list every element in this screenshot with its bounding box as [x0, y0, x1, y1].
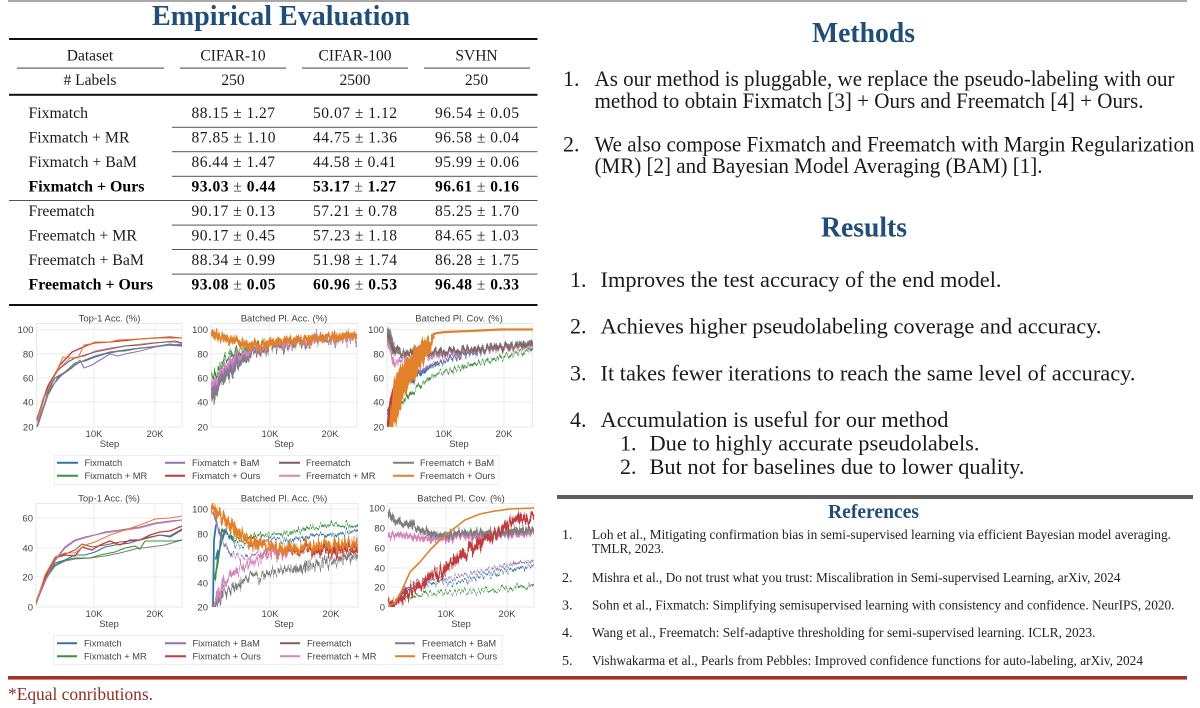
row: Freematch + MR: Freematch + MR: [28, 228, 138, 244]
legend item: Freematch + BaM: Freematch + BaM: [422, 639, 496, 649]
row: Freematch + BaM: [28, 252, 519, 269]
line chart: bottom row batched pseudo-label coverage: Step: [451, 619, 471, 630]
line chart: top row batched pseudo-label accuracy: 80: [197, 350, 208, 360]
row: Freematch + Ours: [28, 276, 519, 294]
line chart: bottom row batched pseudo-label coverage: 80: [374, 524, 385, 534]
table header: labels: # Labels: [64, 72, 116, 89]
row: Fixmatch + MR: 44.75 ± 1.36: [313, 130, 397, 146]
row: Fixmatch + BaM: 95.99 ± 0.06: [435, 154, 519, 171]
line chart: top row Top-1 accuracy: 100: [18, 325, 34, 336]
legend item: Freematch + Ours: Freematch + Ours: [422, 652, 498, 662]
table header: dataset: CIFAR-10: [200, 48, 266, 64]
row: Freematch: Freematch: [28, 203, 95, 220]
result item 1: Improves the test accuracy of the end model.: [600, 267, 1002, 292]
row: Freematch + Ours: Freematch + Ours: [28, 276, 153, 294]
row: Fixmatch + Ours: [28, 178, 519, 196]
legend item: Freematch + Ours: Freematch + Ours: [420, 471, 496, 481]
results table: [9, 38, 538, 306]
row: Freematch: [28, 203, 519, 220]
references list: [562, 528, 1174, 669]
line chart: top row batched pseudo-label accuracy: 10K: [262, 429, 279, 440]
line chart: top row batched pseudo-label coverage: [368, 314, 532, 450]
reference 4: Wang et al., Freematch: Self-adaptive thresholding for semi-supervised learning. ICLR, 2023.: [592, 626, 1096, 641]
line chart: top row batched pseudo-label accuracy: 40: [197, 398, 208, 408]
table header: labels: [64, 72, 488, 89]
methods list: [563, 66, 1194, 178]
line chart: bottom row Top-1 accuracy: Step: [99, 619, 119, 630]
row: Fixmatch + BaM: 44.58 ± 0.41: [313, 154, 396, 171]
legend item: Freematch + MR: Freematch + MR: [307, 652, 377, 662]
legend item: Fixmatch + Ours: Fixmatch + Ours: [192, 471, 261, 481]
line chart: bottom row batched pseudo-label accuracy: 20: [197, 602, 208, 614]
line chart: bottom row batched pseudo-label coverage: [369, 494, 534, 630]
row: Freematch: 57.21 ± 0.78: [313, 203, 397, 220]
legend item: Fixmatch + MR: Fixmatch + MR: [84, 652, 147, 662]
line chart: top row Top-1 accuracy: [18, 314, 182, 450]
line chart: top row Top-1 accuracy: 20: [23, 422, 34, 434]
reference 1: 1.: [562, 528, 572, 543]
result item 2: Achieves higher pseudolabeling coverage and accuracy.: [600, 314, 1102, 338]
row: Fixmatch + BaM: Fixmatch + BaM: [28, 154, 137, 171]
legend item: Fixmatch: Fixmatch: [84, 458, 122, 468]
line chart: top row batched pseudo-label coverage: Step: [449, 439, 469, 450]
line chart: bottom row batched pseudo-label coverage: 40: [374, 564, 385, 574]
line chart: top row batched pseudo-label accuracy: 100: [192, 325, 208, 336]
row: Fixmatch + Ours: 53.17 ± 1.27: [313, 178, 396, 196]
legend item: Fixmatch + BaM: Fixmatch + BaM: [192, 458, 259, 468]
table header: dataset: [67, 48, 498, 64]
row: Fixmatch: Fixmatch: [28, 105, 88, 122]
title: Empirical Evaluation: Empirical Evaluation: [152, 1, 410, 32]
line chart: bottom row batched pseudo-label coverage: 100: [369, 504, 385, 514]
method item 1: [563, 66, 1175, 113]
results list: [570, 267, 1136, 479]
result item 1: 1.: [570, 267, 586, 292]
row: Fixmatch + BaM: 86.44 ± 1.47: [192, 154, 275, 171]
legend item: Fixmatch + MR: [57, 652, 147, 662]
row: Freematch + BaM: 88.34 ± 0.99: [192, 252, 275, 269]
legend item: Freematch + MR: Freematch + MR: [306, 471, 376, 481]
row: Freematch + MR: [28, 228, 519, 244]
reference 5: 5.: [562, 654, 572, 669]
result sub-item 2: But not for baselines due to lower quality.: [650, 454, 1024, 479]
line chart: top row batched pseudo-label coverage: Batched Pl. Cov. (%): [415, 314, 503, 324]
legend item: Freematch: Freematch: [307, 639, 351, 649]
line chart: bottom row Top-1 accuracy: 20: [22, 572, 33, 584]
legend item: Fixmatch: Fixmatch: [84, 639, 122, 649]
table header: dataset: CIFAR-100: [319, 48, 392, 64]
row: Freematch: 90.17 ± 0.13: [192, 203, 275, 220]
line chart: bottom row batched pseudo-label accuracy: 40: [197, 578, 208, 590]
legend item: Fixmatch: [57, 458, 122, 468]
line chart: bottom row batched pseudo-label accuracy: Step: [274, 619, 294, 630]
legend item: Freematch + BaM: Freematch + BaM: [420, 458, 494, 468]
row: Fixmatch: 88.15 ± 1.27: [192, 105, 275, 122]
line chart: top row batched pseudo-label accuracy: 20: [197, 422, 208, 434]
line chart: top row Top-1 accuracy: 10K: [86, 429, 103, 440]
row: Freematch + Ours: 93.08 ± 0.05: [192, 276, 276, 294]
method item 2: (MR) [2] and Bayesian Model Averaging (BAM) [1].: [594, 153, 1042, 178]
result item 3: It takes fewer iterations to reach the same level of accuracy.: [600, 360, 1136, 386]
result sub-item 2: 2.: [620, 454, 636, 479]
row: Freematch + BaM: 51.98 ± 1.74: [313, 252, 397, 269]
row: Fixmatch: 96.54 ± 0.05: [435, 105, 519, 122]
line chart: top row batched pseudo-label coverage: 20K: [496, 429, 513, 440]
row: Freematch + Ours: 96.48 ± 0.33: [435, 276, 519, 294]
reference 1: TMLR, 2023.: [592, 542, 664, 557]
line chart: top row batched pseudo-label accuracy: Batched Pl. Acc. (%): [241, 314, 327, 324]
line chart: top row batched pseudo-label coverage: 100: [368, 325, 384, 336]
reference 3: Sohn et al., Fixmatch: Simplifying semisupervised learning with consistency and confidence. NeurIPS, 2020.: [592, 598, 1174, 614]
legend item: Freematch: [280, 639, 351, 649]
line chart: bottom row Top-1 accuracy: [22, 494, 182, 630]
line chart: bottom row batched pseudo-label accuracy: Batched Pl. Acc. (%): [241, 494, 327, 504]
row: Fixmatch: 50.07 ± 1.12: [313, 105, 397, 122]
legend: top row: [54, 456, 499, 484]
line chart: bottom row Top-1 accuracy: 10K: [86, 609, 103, 620]
row: Fixmatch + MR: 96.58 ± 0.04: [435, 130, 519, 146]
line chart: bottom row Top-1 accuracy: 60: [22, 514, 33, 524]
row: Freematch + BaM: 86.28 ± 1.75: [435, 252, 519, 269]
method item 1: 1.: [563, 66, 580, 91]
row: Freematch + Ours: 60.96 ± 0.53: [313, 276, 397, 294]
line chart: top row batched pseudo-label coverage: 10K: [436, 429, 453, 440]
line chart: bottom row batched pseudo-label accuracy: 60: [197, 554, 208, 564]
line chart: bottom row Top-1 accuracy: 0: [28, 602, 33, 614]
table header: labels: 2500: [340, 72, 371, 89]
line chart: bottom row batched pseudo-label accuracy: [192, 494, 358, 630]
row: Freematch + MR: 57.23 ± 1.18: [313, 228, 397, 244]
reference 1: Loh et al., Mitigating confirmation bias in semi-supervised learning via efficient Bayesian model averaging.: [592, 528, 1171, 543]
line chart: bottom row Top-1 accuracy: Top-1 Acc. (%): [78, 494, 140, 504]
line chart: top row batched pseudo-label coverage: 20: [373, 422, 384, 434]
heading: References: References: [828, 502, 919, 523]
legend item: Freematch: Freematch: [306, 458, 350, 468]
line chart: top row Top-1 accuracy: 60: [23, 374, 34, 384]
row: Fixmatch + Ours: 96.61 ± 0.16: [435, 178, 519, 196]
row: Fixmatch + MR: Fixmatch + MR: [28, 130, 130, 146]
row: Fixmatch: [28, 105, 519, 122]
line chart: bottom row batched pseudo-label coverage: 20K: [499, 609, 516, 620]
line chart: top row batched pseudo-label accuracy: [192, 314, 357, 450]
method item 2: [563, 132, 1194, 178]
line chart: top row Top-1 accuracy: Step: [100, 439, 119, 450]
method item 1: method to obtain Fixmatch [3] + Ours and Freematch [4] + Ours.: [594, 88, 1144, 113]
line chart: top row batched pseudo-label coverage: 40: [373, 398, 384, 408]
legend item: Fixmatch + MR: Fixmatch + MR: [84, 471, 148, 481]
line chart: bottom row Top-1 accuracy: 20K: [147, 609, 164, 620]
result item 4: 4.: [570, 407, 586, 432]
row: Fixmatch + Ours: Fixmatch + Ours: [28, 178, 144, 196]
table header: dataset: SVHN: [455, 48, 498, 64]
reference 2: Mishra et al., Do not trust what you trust: Miscalibration in Semi-supervised Learning, arXiv, 2024: [592, 571, 1120, 586]
reference 1: [562, 528, 1171, 557]
result item 3: 3.: [570, 360, 586, 386]
reference 4: 4.: [562, 626, 572, 641]
line chart: top row batched pseudo-label accuracy: Step: [274, 439, 294, 450]
line chart: bottom row batched pseudo-label coverage: 0: [380, 602, 385, 614]
method item 1: As our method is pluggable, we replace the pseudo-labeling with our: [594, 66, 1175, 91]
line chart: top row Top-1 accuracy: Top-1 Acc. (%): [79, 314, 140, 324]
legend: bottom row: [54, 636, 502, 664]
line chart: bottom row batched pseudo-label coverage: 10K: [438, 609, 455, 620]
table header: labels: 250: [465, 72, 488, 89]
reference 3: 3.: [562, 598, 572, 614]
row: Fixmatch + MR: [28, 130, 519, 146]
result sub-item 1: 1.: [620, 430, 636, 456]
line chart: bottom row batched pseudo-label coverage: Batched Pl. Cov. (%): [417, 494, 505, 504]
line chart: top row Top-1 accuracy: 20K: [147, 429, 164, 440]
result item 4: Accumulation is useful for our method: [600, 407, 948, 432]
result sub-item 1: Due to highly accurate pseudolabels.: [650, 430, 980, 456]
result item 2: 2.: [570, 314, 586, 338]
line chart: bottom row Top-1 accuracy: 40: [22, 544, 33, 554]
row: Freematch: 85.25 ± 1.70: [435, 203, 519, 220]
row: Freematch + MR: 90.17 ± 0.45: [192, 228, 275, 244]
line chart: top row batched pseudo-label coverage: 80: [373, 350, 384, 360]
heading: Methods: Methods: [812, 18, 915, 49]
line chart: top row batched pseudo-label accuracy: 60: [197, 374, 208, 384]
row: Freematch + BaM: Freematch + BaM: [28, 252, 144, 269]
row: Fixmatch + Ours: 93.03 ± 0.44: [192, 178, 276, 196]
line chart: bottom row batched pseudo-label coverage: 60: [374, 544, 385, 554]
line chart: top row batched pseudo-label accuracy: 20K: [322, 429, 339, 440]
footnote: *Equal conributions.: [8, 684, 153, 704]
line chart: bottom row batched pseudo-label accuracy: 100: [192, 504, 208, 516]
line chart: top row batched pseudo-label coverage: 60: [373, 374, 384, 384]
table header: dataset: Dataset: [67, 48, 114, 64]
row: Fixmatch + MR: 87.85 ± 1.10: [192, 130, 276, 146]
row: Fixmatch + BaM: [28, 154, 519, 171]
line chart: top row Top-1 accuracy: 80: [23, 350, 34, 360]
legend item: Freematch: [279, 458, 350, 468]
method item 2: 2.: [563, 132, 580, 156]
legend item: Fixmatch + BaM: Fixmatch + BaM: [192, 639, 260, 649]
legend item: Fixmatch + Ours: Fixmatch + Ours: [192, 652, 261, 662]
line chart: bottom row batched pseudo-label coverage: 20: [374, 582, 385, 594]
row: Freematch + MR: 84.65 ± 1.03: [435, 228, 519, 244]
reference 2: 2.: [562, 571, 572, 586]
reference 5: Vishwakarma et al., Pearls from Pebbles: Improved confidence functions for auto-labeling, arXiv, 2024: [592, 654, 1143, 669]
legend item: Fixmatch: [57, 639, 122, 649]
table header: labels: 250: [221, 72, 245, 89]
line chart: top row Top-1 accuracy: 40: [23, 398, 34, 408]
line chart: bottom row batched pseudo-label accuracy: 80: [197, 530, 208, 540]
legend item: Fixmatch + MR: [57, 471, 148, 481]
heading: Results: Results: [821, 212, 907, 244]
line chart: bottom row batched pseudo-label accuracy: 20K: [323, 609, 340, 620]
line chart: bottom row batched pseudo-label accuracy: 10K: [262, 609, 279, 620]
